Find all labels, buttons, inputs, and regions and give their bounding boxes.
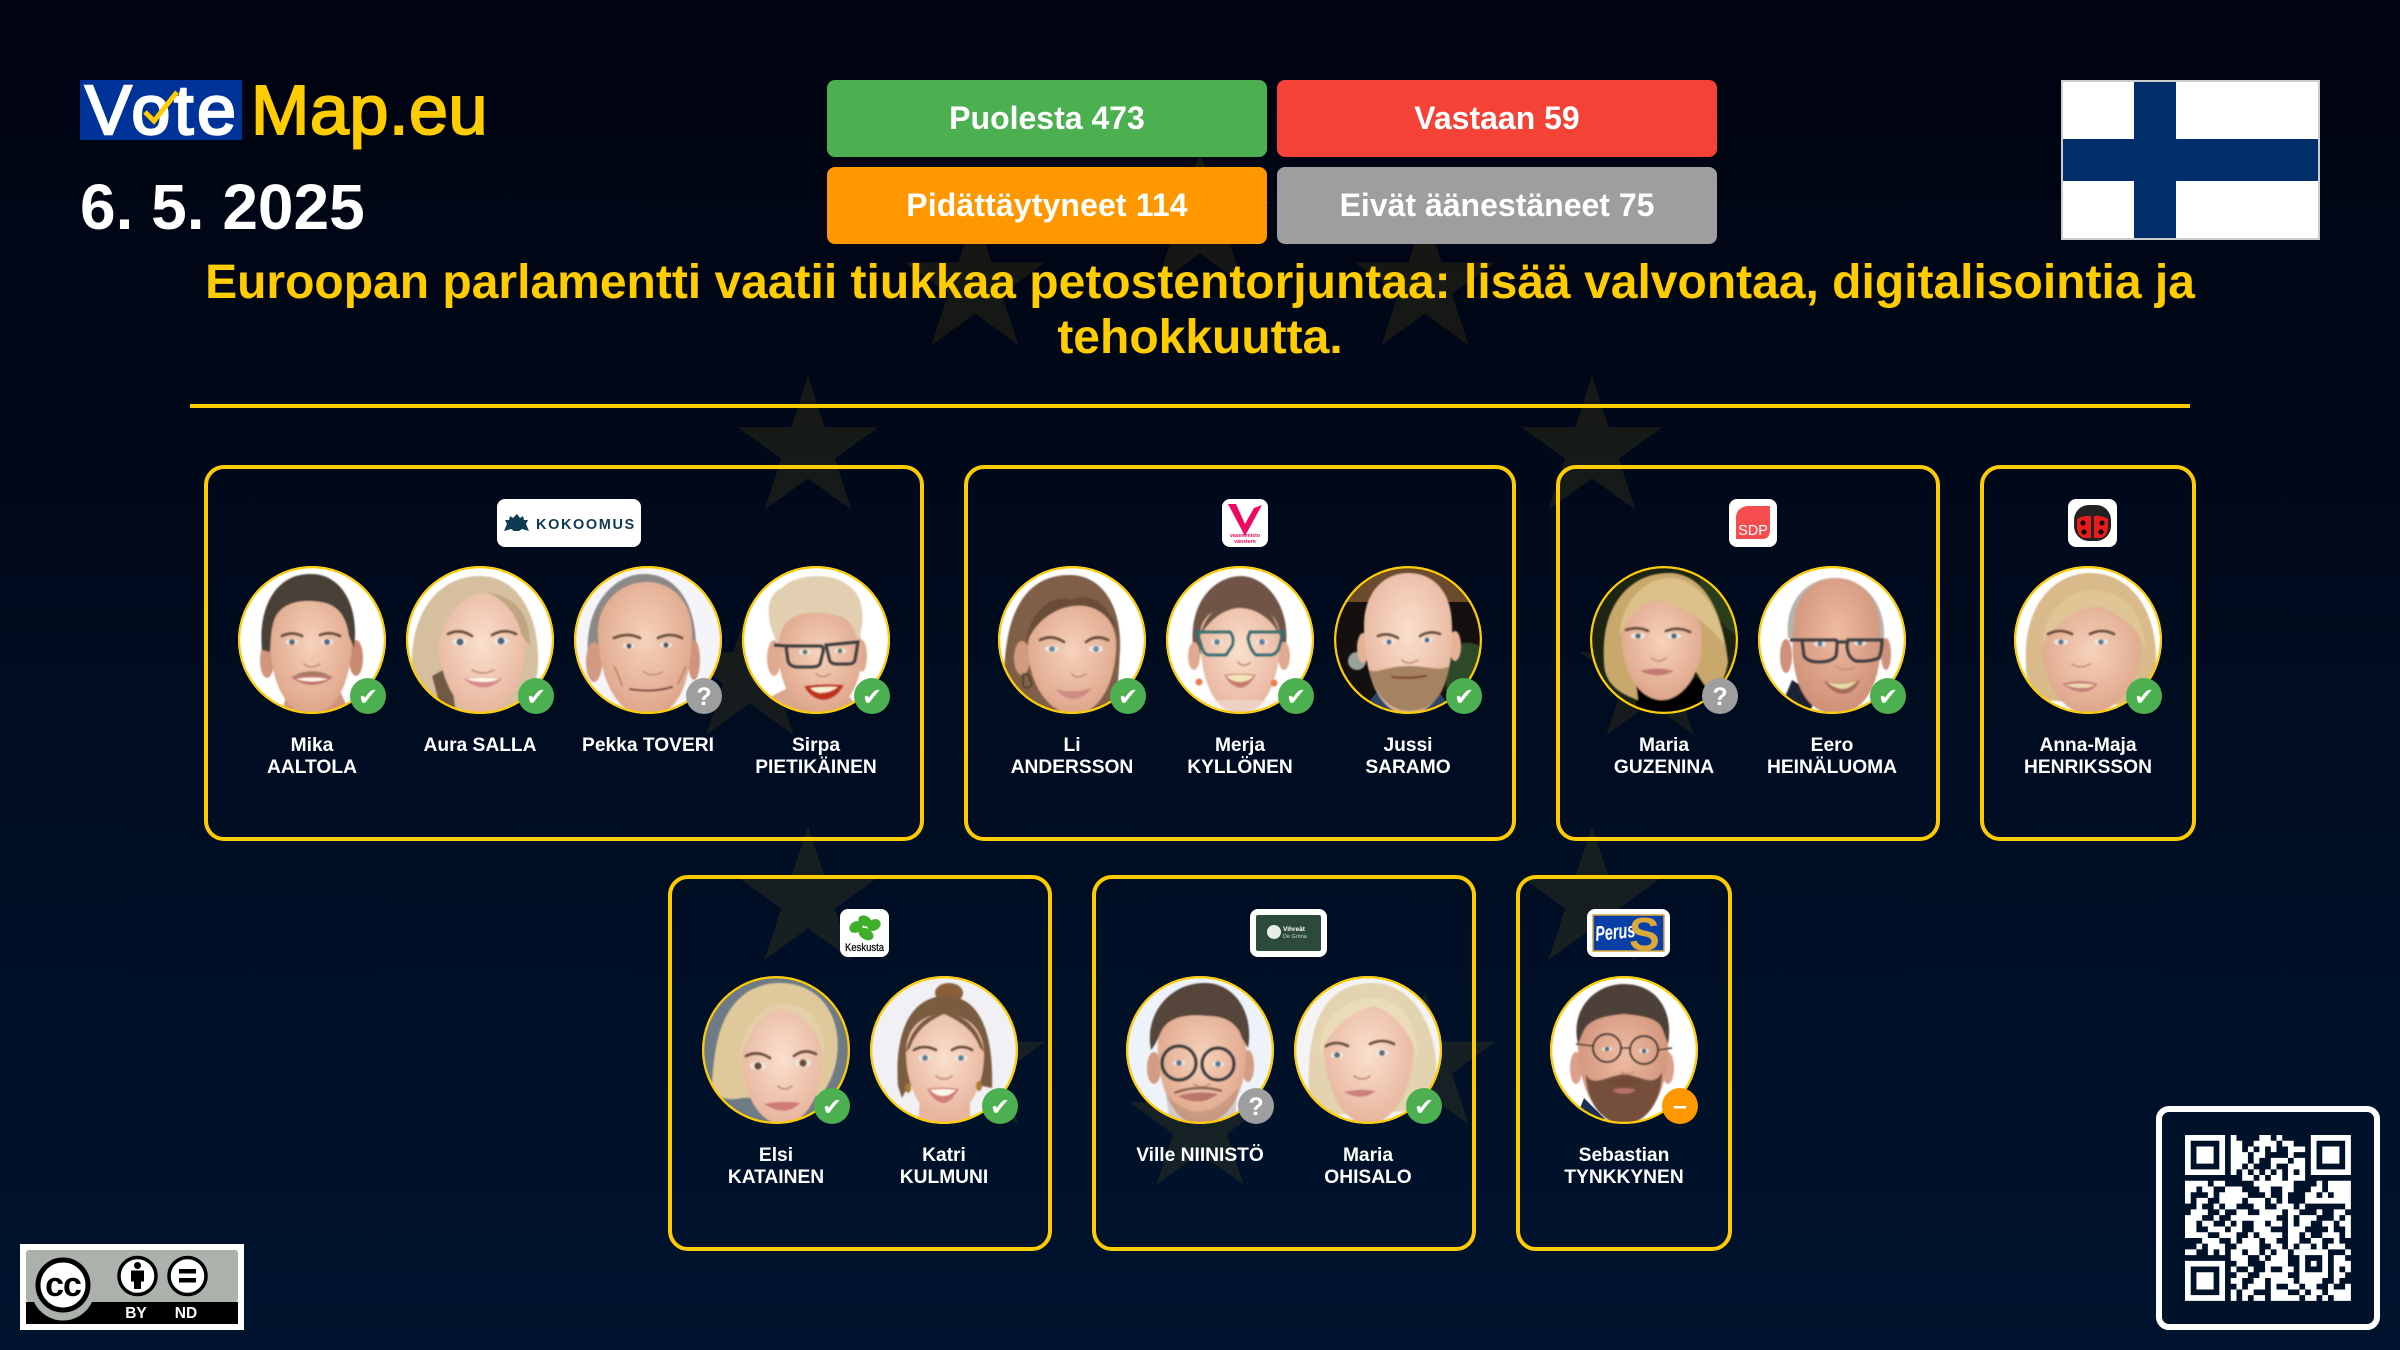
licence badge: CC BY-ND: BY — [125, 1305, 147, 1322]
name: Maria — [1639, 735, 1689, 756]
party logo: Perussuomalaiset: Perus — [1594, 919, 1636, 946]
panel: SDP — [1558, 467, 1938, 839]
vote totals — [827, 80, 1717, 244]
total: abstained — [827, 167, 1267, 244]
photo — [870, 976, 1018, 1124]
name: Katri — [922, 1145, 966, 1166]
vote badge: for — [1870, 678, 1906, 714]
vote badge: for — [854, 678, 890, 714]
vote badge: for — [1446, 678, 1482, 714]
party logo: Perussuomalaiset: S — [1629, 908, 1660, 960]
vote badge: for: ✔ — [1286, 683, 1306, 711]
name: Pekka TOVERI — [582, 735, 714, 756]
name: TYNKKYNEN — [1564, 1167, 1684, 1188]
name: Aura SALLA — [424, 735, 537, 756]
photo — [1550, 976, 1698, 1124]
party logo: Keskusta: Keskusta — [845, 942, 885, 954]
name: KATAINEN — [728, 1167, 824, 1188]
panel: Perussuomalaiset — [1518, 877, 1730, 1249]
person: Katri Kulmuni — [870, 976, 1018, 1188]
name: AALTOLA — [267, 757, 357, 778]
vote badge: for — [814, 1088, 850, 1124]
name: ANDERSSON — [1011, 757, 1133, 778]
panel: Keskusta — [670, 877, 1050, 1249]
person: Aura Salla — [406, 566, 554, 756]
vote badge: for — [1110, 678, 1146, 714]
name: Elsi — [759, 1145, 793, 1166]
party logo: Perussuomalaiset — [1587, 908, 1670, 960]
panel: Vihreät — [1094, 877, 1474, 1249]
photo — [1590, 566, 1738, 714]
vote badge: for: ✔ — [1454, 683, 1474, 711]
person: Eero Heinäluoma — [1758, 566, 1906, 778]
total: for — [827, 80, 1267, 157]
licence badge: CC BY-ND: cc — [45, 1266, 81, 1304]
flag of Finland — [2061, 80, 2320, 240]
name: HEINÄLUOMA — [1767, 757, 1897, 778]
photo — [1126, 976, 1274, 1124]
total: for: Puolesta 473 — [949, 100, 1145, 136]
vote badge: not voted: ? — [1712, 683, 1728, 711]
party logo: Keskusta — [840, 909, 889, 957]
panel: Vasemmistoliitto — [966, 467, 1514, 839]
name: Mika — [291, 735, 334, 756]
person: Maria Ohisalo — [1294, 976, 1442, 1188]
name: Sirpa — [792, 735, 840, 756]
photo — [1334, 566, 1482, 714]
logo: VoteMap.eu — [80, 71, 488, 149]
total: did not vote — [1277, 167, 1717, 244]
total: did not vote: Eivät äänestäneet 75 — [1340, 187, 1654, 223]
name: OHISALO — [1324, 1167, 1412, 1188]
name: KULMUNI — [900, 1167, 988, 1188]
vote badge: for: ✔ — [862, 683, 882, 711]
party logo: Vasemmisto: vasemmisto — [1230, 533, 1260, 539]
photo — [1294, 976, 1442, 1124]
name: Sebastian — [1579, 1145, 1669, 1166]
vote badge: for — [350, 678, 386, 714]
total: against: Vastaan 59 — [1414, 100, 1580, 136]
person: Pekka Toveri — [574, 566, 722, 756]
vote badge: not voted: ? — [1248, 1093, 1264, 1121]
person: Maria Guzenina — [1590, 566, 1738, 778]
vote badge: for: ✔ — [2134, 683, 2154, 711]
panel: RKP — [1982, 467, 2194, 839]
vote badge: not voted — [1238, 1088, 1274, 1124]
person: Elsi Katainen — [702, 976, 850, 1188]
licence badge: CC BY-ND: ND — [175, 1305, 197, 1322]
name: Ville NIINISTÖ — [1136, 1145, 1264, 1166]
total: abstained: Pidättäytyneet 114 — [906, 187, 1188, 223]
vote badge: for — [1278, 678, 1314, 714]
person: Sebastian Tynkkynen — [1550, 976, 1698, 1188]
photo — [2014, 566, 2162, 714]
person: Mika Aaltola — [238, 566, 386, 778]
name: Li — [1063, 735, 1081, 756]
title: Euroopan parlamentti vaatii tiukkaa petostentorjuntaa: lisää valvontaa, digitalisointia ja — [205, 256, 2195, 309]
name: HENRIKSSON — [2024, 757, 2152, 778]
title: tehokkuutta. — [1057, 311, 1343, 364]
background: EU star circle — [680, 151, 1720, 1185]
photo — [574, 566, 722, 716]
vote badge: for: ✔ — [526, 683, 546, 711]
party logo: Kokoomus — [497, 499, 641, 547]
vote badge: for — [982, 1088, 1018, 1124]
title — [205, 256, 2195, 364]
party logo: Vihreät: De Gröna — [1283, 934, 1308, 940]
person: Anna-Maja Henriksson — [2014, 566, 2162, 778]
name: Merja — [1215, 735, 1265, 756]
party logo: RKP ladybird — [2068, 499, 2117, 547]
name: PIETIKÄINEN — [755, 757, 877, 778]
date: 6. 5. 2025 — [80, 171, 365, 243]
name: Jussi — [1383, 735, 1433, 756]
vote badge: for: ✔ — [1414, 1093, 1434, 1121]
vote badge: for: ✔ — [1118, 683, 1138, 711]
person: Sirpa Pietikäinen — [742, 566, 890, 778]
vote badge: abstained: – — [1673, 1092, 1687, 1120]
photo — [238, 566, 386, 714]
vote badge: for: ✔ — [358, 683, 378, 711]
party logo: SDP — [1729, 499, 1777, 547]
name: Anna-Maja — [2039, 735, 2137, 756]
person: Merja Kyllönen — [1166, 566, 1314, 778]
panel: Kokoomus — [206, 467, 922, 839]
name: SARAMO — [1365, 757, 1451, 778]
name: KYLLÖNEN — [1187, 757, 1293, 778]
photo — [742, 566, 890, 714]
vote badge: for: ✔ — [990, 1093, 1010, 1121]
photo — [406, 566, 554, 716]
party logo: Vasemmisto — [1222, 499, 1268, 547]
person: Jussi Saramo — [1334, 566, 1482, 778]
vote badge: abstained — [1662, 1088, 1698, 1124]
vote badge: not voted: ? — [696, 683, 712, 711]
photo — [1166, 566, 1314, 714]
logo: VoteMap.eu: Vote — [85, 71, 240, 149]
licence badge: CC BY-ND — [20, 1244, 244, 1330]
QR code — [2159, 1109, 2377, 1327]
person: Li Andersson — [998, 566, 1146, 778]
vote badge: for — [1406, 1088, 1442, 1124]
vote badge: for — [2126, 678, 2162, 714]
photo — [702, 976, 850, 1124]
vote badge: not voted — [1702, 678, 1738, 714]
party logo: Vihreät — [1250, 909, 1327, 957]
vote badge: for — [518, 678, 554, 714]
party logo: Vihreät: Vihreät — [1283, 926, 1306, 933]
vote badge: for: ✔ — [1878, 683, 1898, 711]
name: Eero — [1811, 735, 1853, 756]
photo — [998, 566, 1146, 716]
party logo: SDP: SDP — [1738, 523, 1768, 539]
vote badge: not voted — [686, 678, 722, 714]
party logo: Kokoomus: KOKOOMUS — [536, 517, 636, 533]
vote badge: for: ✔ — [822, 1093, 842, 1121]
photo — [1758, 566, 1906, 714]
name: GUZENINA — [1614, 757, 1714, 778]
total: against — [1277, 80, 1717, 157]
person: Ville Niinistö — [1126, 976, 1274, 1166]
party logo: Vasemmisto: vänstern — [1234, 539, 1256, 545]
name: Maria — [1343, 1145, 1393, 1166]
logo: VoteMap.eu: Map.eu — [251, 71, 488, 149]
